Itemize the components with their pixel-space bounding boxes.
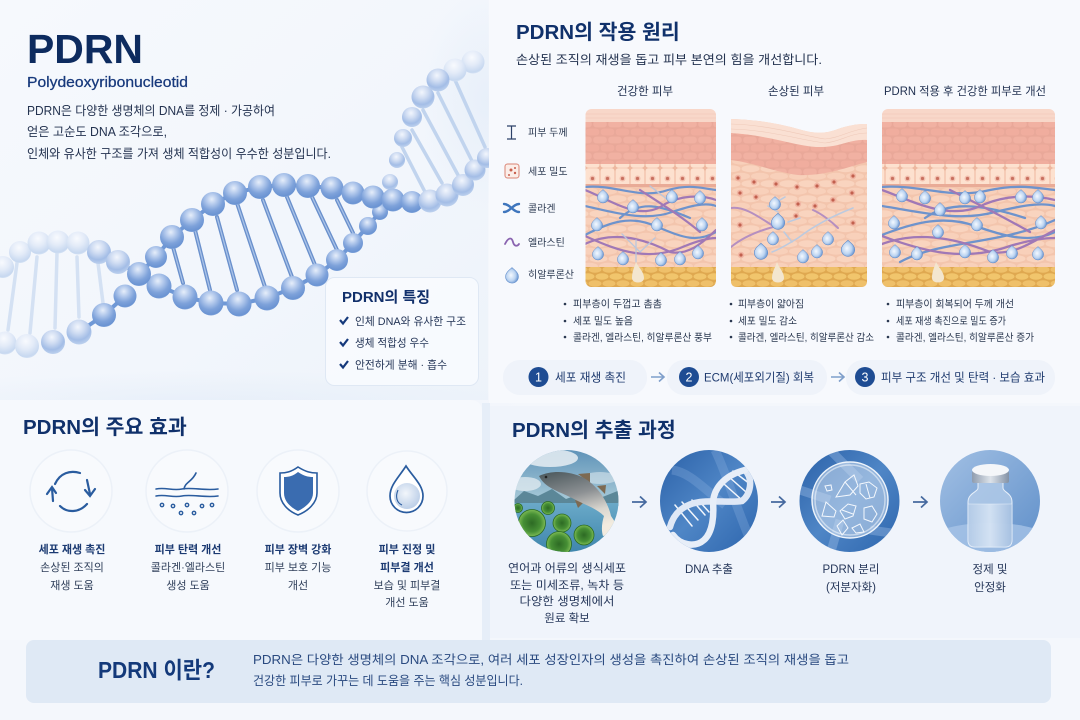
step 1 xyxy=(503,360,647,395)
skin panel: healthy xyxy=(585,109,716,287)
column headings xyxy=(617,85,1046,98)
card: PDRN features xyxy=(326,278,478,386)
banner text xyxy=(253,653,849,688)
icon: cycle arrows xyxy=(47,472,95,511)
step: PDRN isolation xyxy=(799,450,905,594)
effects heading: PDRN의 주요 효과 xyxy=(23,416,187,439)
step 3 xyxy=(846,360,1055,395)
broken fibers xyxy=(731,197,853,252)
legend: 세포 밀도 xyxy=(528,166,568,178)
bullet lists: 세포 밀도 감소 xyxy=(738,316,797,328)
step: PDRN isolation: PDRN 분리 xyxy=(823,563,879,576)
arrow xyxy=(913,496,927,508)
skin panel: damaged xyxy=(731,119,867,287)
effect: cell regeneration: 세포 재생 촉진 xyxy=(39,542,105,556)
step: purification: 안정화 xyxy=(974,581,1006,594)
icon: skin layers xyxy=(156,473,218,515)
effect: cell regeneration: 재생 도움 xyxy=(50,579,94,592)
effect: skin elasticity xyxy=(146,450,228,592)
vial xyxy=(968,464,1012,547)
legend xyxy=(504,126,574,283)
step 2: 2 xyxy=(686,370,693,384)
banner heading: PDRN 이란? xyxy=(98,657,215,683)
subtitle: Polydeoxyribonucleotid xyxy=(27,75,188,91)
step: DNA extraction xyxy=(660,450,758,576)
algae xyxy=(514,502,594,556)
step 2 xyxy=(667,360,827,395)
effect: skin elasticity: 콜라겐·엘라스틴 xyxy=(151,561,225,574)
effect: soothing xyxy=(367,451,447,609)
feature list: 생체 적합성 우수 xyxy=(355,336,429,350)
icon: water drop xyxy=(390,466,423,512)
legend: 피부 두께 xyxy=(528,127,568,139)
fish xyxy=(539,472,615,536)
icon: thickness xyxy=(507,126,516,139)
step: DNA extraction: DNA 추출 xyxy=(685,563,733,576)
icon: hyaluronic acid xyxy=(506,268,518,283)
mechanism subtitle: 손상된 조직의 재생을 돕고 피부 본연의 힘을 개선합니다. xyxy=(516,53,822,67)
bullet lists: 콜라겐, 엘라스틴, 히알루론산 감소 xyxy=(738,331,874,344)
step flow xyxy=(503,360,1055,395)
effect: skin elasticity: 생성 도움 xyxy=(166,579,210,592)
step: raw material: 원료 확보 xyxy=(544,611,590,625)
bullet lists: 세포 밀도 높음 xyxy=(573,316,633,328)
feature list xyxy=(340,315,466,372)
step: raw material: 다양한 생명체에서 xyxy=(520,595,614,608)
card heading: PDRN의 특징 xyxy=(342,289,430,306)
icon: cell density xyxy=(505,164,519,178)
icon: elastin xyxy=(505,238,519,246)
legend: 콜라겐 xyxy=(528,203,556,215)
effect: skin barrier: 피부 장벽 강화 xyxy=(265,542,331,556)
banner text: 건강한 피부로 가꾸는 데 도움을 주는 핵심 성분입니다. xyxy=(253,673,523,688)
bullet lists xyxy=(564,298,1034,344)
feature list: 안전하게 분해 · 흡수 xyxy=(355,358,447,372)
step: raw material xyxy=(508,449,626,625)
banner: what is PDRN xyxy=(26,640,1051,703)
icon: collagen xyxy=(504,204,519,212)
bullet lists: 피부층이 두껍고 촘촘 xyxy=(573,298,662,310)
effect: skin barrier xyxy=(257,450,339,592)
effect: soothing: 개선 도움 xyxy=(385,596,429,609)
step 2: ECM(세포외기질) 회복 xyxy=(704,370,814,384)
effect: skin barrier: 피부 보호 기능 xyxy=(265,561,331,574)
column headings: 건강한 피부 xyxy=(617,85,673,98)
effect: cell regeneration: 손상된 조직의 xyxy=(40,561,104,574)
arrow xyxy=(771,496,785,508)
bullet lists: 피부층이 회복되어 두께 개선 xyxy=(896,298,1014,310)
banner text: PDRN은 다양한 생명체의 DNA 조각으로, 여러 세포 성장인자의 생성을 촉진하여 손상된 조직의 재생을 돕고 xyxy=(253,653,849,667)
column headings: PDRN 적용 후 건강한 피부로 개선 xyxy=(884,85,1046,98)
divider strip xyxy=(482,403,490,640)
scattered cell nuclei xyxy=(735,173,856,258)
bullet lists: 콜라겐, 엘라스틴, 히알루론산 풍부 xyxy=(573,331,712,344)
step: PDRN isolation: (저분자화) xyxy=(826,581,876,594)
effect: soothing: 보습 및 피부결 xyxy=(374,579,440,592)
icon: shield xyxy=(280,467,317,515)
effect: skin barrier: 개선 xyxy=(288,579,308,592)
legend: 히알루론산 xyxy=(528,269,574,281)
effect: cell regeneration xyxy=(30,450,112,592)
intro text: PDRN은 다양한 생명체의 DNA를 정제 · 가공하여 xyxy=(27,104,275,118)
sparse droplets xyxy=(754,196,855,263)
step: purification xyxy=(940,450,1040,592)
step 3: 피부 구조 개선 및 탄력 · 보습 효과 xyxy=(881,370,1045,384)
effect: soothing: 피부 진정 및 xyxy=(379,543,435,556)
panel: mechanism xyxy=(489,22,1055,387)
intro text: 얻은 고순도 DNA 조각으로, xyxy=(27,125,167,139)
bullet lists: 피부층이 얇아짐 xyxy=(738,298,804,310)
extraction heading: PDRN의 추출 과정 xyxy=(512,419,676,442)
fragments xyxy=(822,475,877,535)
step: raw material: 또는 미세조류, 녹차 등 xyxy=(510,579,624,592)
bullet lists: 세포 재생 촉진으로 밀도 증가 xyxy=(896,316,1006,328)
restored fibers xyxy=(882,187,1055,262)
arrow xyxy=(831,372,844,382)
skin panel: improved xyxy=(882,109,1055,287)
mechanism heading: PDRN의 작용 원리 xyxy=(516,21,680,44)
intro text: 인체와 유사한 구조를 가져 생체 적합성이 우수한 성분입니다. xyxy=(27,147,331,161)
restored droplets xyxy=(888,188,1047,282)
panel: main effects xyxy=(0,400,482,640)
intro text xyxy=(27,104,331,161)
hyaluronic droplets xyxy=(591,190,708,282)
column headings: 손상된 피부 xyxy=(768,85,824,98)
helix xyxy=(670,470,750,545)
effect: soothing: 피부결 개선 xyxy=(380,561,434,574)
legend: 엘라스틴 xyxy=(528,236,565,249)
DNA helix illustration xyxy=(0,50,497,358)
step: raw material: 연어과 어류의 생식세포 xyxy=(508,562,626,575)
step 1: 1 xyxy=(535,370,542,384)
arrow xyxy=(651,372,664,382)
effect: skin elasticity: 피부 탄력 개선 xyxy=(155,543,221,556)
step 3: 3 xyxy=(862,370,869,384)
title: PDRN xyxy=(27,26,143,72)
arrow xyxy=(632,496,646,508)
panel: hero xyxy=(0,0,558,440)
panel: extraction process xyxy=(508,420,1040,624)
feature list: 인체 DNA와 유사한 구조 xyxy=(355,315,466,328)
bullet lists: 콜라겐, 엘라스틴, 히알루론산 증가 xyxy=(896,331,1034,344)
step: purification: 정제 및 xyxy=(973,563,1007,576)
fibers: collagen and elastin xyxy=(585,186,716,262)
step 1: 세포 재생 촉진 xyxy=(555,370,626,384)
